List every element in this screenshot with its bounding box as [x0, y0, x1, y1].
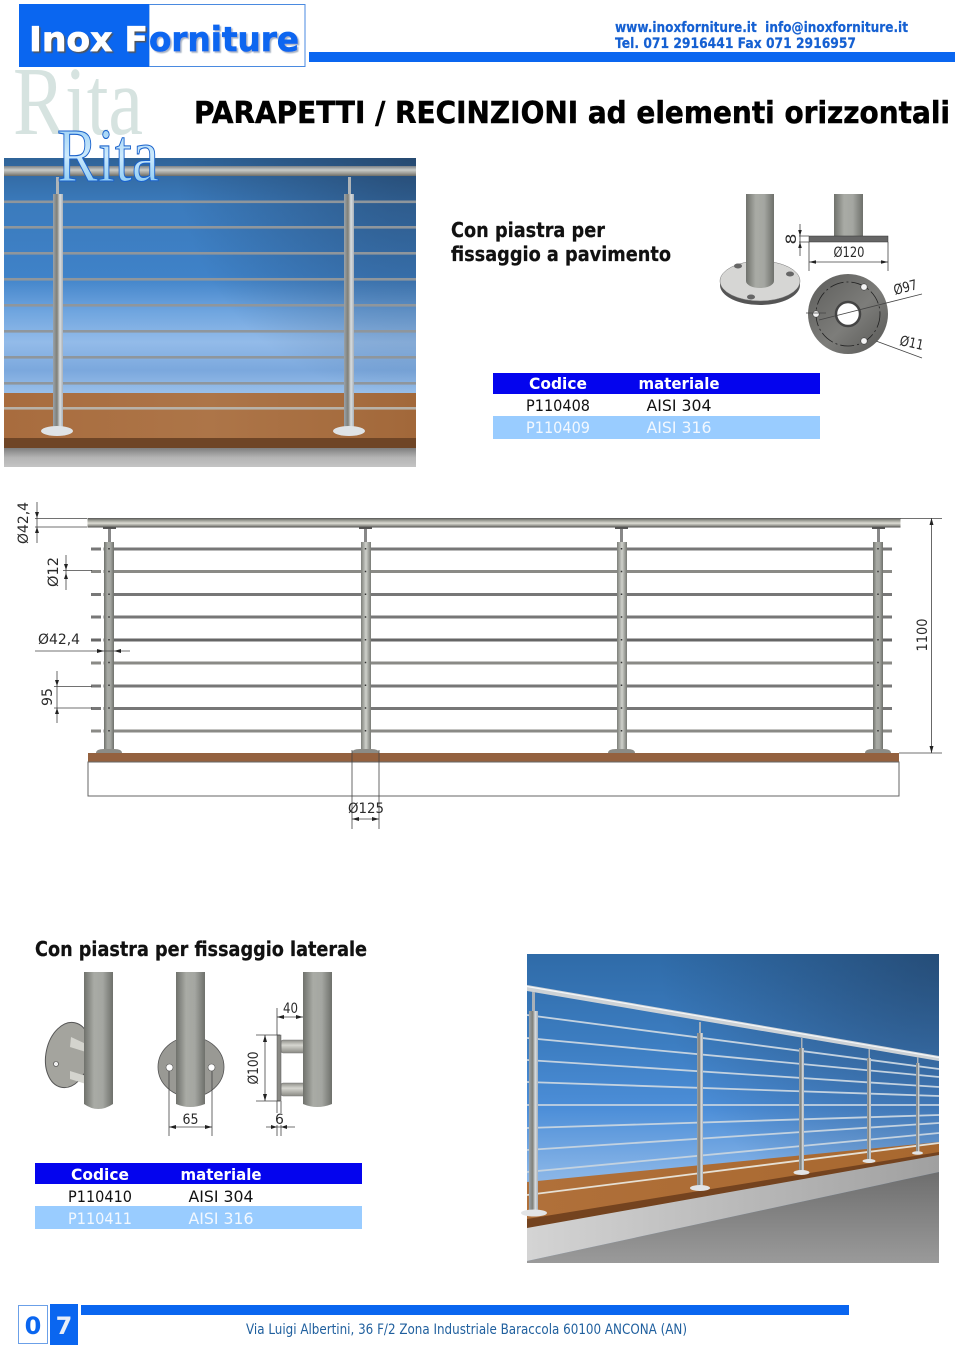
- diagram: side plate: [40, 972, 332, 1136]
- page number: [18, 1304, 78, 1345]
- side view: [246, 972, 332, 1136]
- post 1: [96, 527, 122, 753]
- logo: Rita: Rita: [57, 114, 159, 198]
- table: floor plate codes: P110409: [526, 418, 590, 437]
- table: floor plate codes: AISI 304: [646, 396, 712, 415]
- footer address: Via Luigi Albertini, 36 F/2 Zona Industriale Baraccola 60100 ANCONA (AN): [246, 1322, 687, 1338]
- post 2: [352, 527, 379, 753]
- technical drawing: railing elevation: [16, 502, 942, 829]
- contact details: www.inoxforniture.it info@inoxforniture.it: [615, 20, 908, 36]
- dimensions: rail spacing: 95: [40, 688, 56, 706]
- plate side view: [784, 194, 888, 271]
- table: side plate codes: materiale: [180, 1165, 262, 1184]
- table: side plate codes: P110410: [68, 1187, 132, 1206]
- table: floor plate codes: AISI 316: [646, 418, 712, 437]
- contact details: [615, 20, 908, 52]
- plate side view: Ø120: [834, 245, 864, 261]
- side view: 6: [275, 1112, 284, 1128]
- header logo: Inox Forniture: orniture: [149, 20, 299, 60]
- table: side plate codes: AISI 304: [188, 1187, 254, 1206]
- subheading: floor plate: [451, 218, 671, 266]
- plate bottom view: Ø97: [892, 277, 919, 299]
- dimensions: post diameter: [35, 632, 130, 653]
- post 4: [865, 527, 891, 753]
- header logo: Inox Forniture: Inox F: [29, 20, 148, 60]
- table: side plate codes: AISI 316: [188, 1209, 254, 1228]
- floor slab: [88, 753, 899, 796]
- dimensions: height: [899, 518, 942, 753]
- table: side plate codes: P110411: [68, 1209, 132, 1228]
- contact details: Tel. 071 2916441 Fax 071 2916957: [615, 36, 856, 52]
- page number: 0: [25, 1312, 41, 1340]
- front view: 65: [182, 1112, 198, 1128]
- side view: Ø100: [246, 1052, 262, 1084]
- table: side plate codes: [35, 1163, 362, 1229]
- subheading: floor plate: Con piastra per: [451, 218, 605, 242]
- dimensions: rail diameter: [46, 555, 92, 590]
- subheading: side plate: Con piastra per fissaggio laterale: [35, 937, 367, 961]
- perspective view: [40, 972, 113, 1109]
- side view: 40: [283, 1001, 298, 1017]
- dimensions: handrail diameter: Ø42,4: [16, 502, 32, 544]
- subheading: floor plate: fissaggio a pavimento: [451, 242, 671, 266]
- header logo: Inox Forniture: [19, 4, 305, 67]
- footer bar: [81, 1305, 849, 1315]
- table: floor plate codes: Codice: [529, 374, 587, 393]
- plate bottom view: [806, 274, 925, 358]
- dimensions: rail diameter: Ø12: [46, 557, 62, 587]
- dimensions: handrail diameter: [16, 502, 87, 544]
- front view: [158, 972, 224, 1136]
- photo: floor-mounted railing: [4, 158, 416, 467]
- dimensions: post diameter: Ø42,4: [38, 632, 80, 648]
- plate perspective view: [720, 194, 800, 305]
- table: side plate codes: Codice: [71, 1165, 129, 1184]
- watermark: Rita: Rita: [13, 48, 143, 156]
- header bar: [309, 52, 955, 62]
- photo: railing in perspective: [521, 954, 939, 1263]
- post 3: [608, 527, 635, 753]
- handrail: [88, 518, 900, 528]
- diagram: floor plate: [720, 194, 925, 358]
- table: floor plate codes: [493, 373, 820, 439]
- dimensions: base diameter: [348, 750, 384, 829]
- page number: 7: [56, 1312, 72, 1340]
- dimensions: rail spacing: [40, 671, 92, 723]
- table: floor plate codes: materiale: [638, 374, 720, 393]
- plate bottom view: Ø11: [898, 333, 925, 354]
- dimensions: height: 1100: [915, 618, 931, 652]
- plate side view: 8: [784, 234, 800, 244]
- horizontal rails: [91, 548, 892, 732]
- table: floor plate codes: P110408: [526, 396, 590, 415]
- dimensions: base diameter: Ø125: [348, 801, 384, 817]
